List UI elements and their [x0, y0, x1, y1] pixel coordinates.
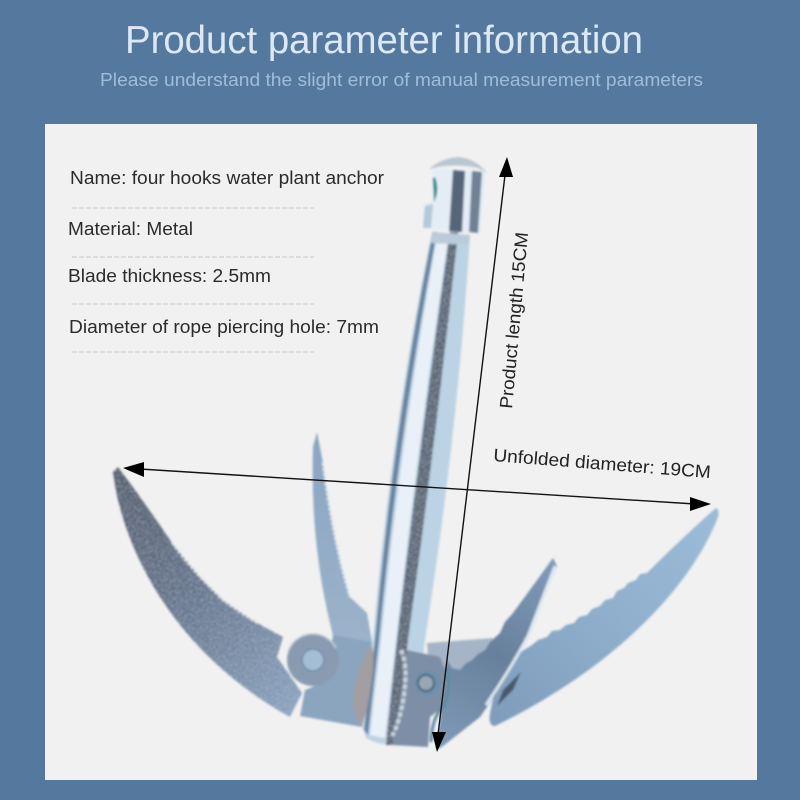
anchor illustration [113, 157, 719, 750]
left bracket [300, 635, 372, 727]
label: product length: Product length 15CM [496, 231, 532, 409]
arrow: product length [432, 157, 513, 752]
back blade [313, 432, 372, 642]
title: Product parameter information [125, 19, 643, 62]
shaft collar [431, 232, 470, 245]
left weld [353, 645, 374, 726]
head [423, 157, 487, 233]
parameter: material: Material: Metal [68, 219, 193, 239]
shaft [362, 232, 470, 745]
parameter list [68, 168, 384, 337]
label: unfolded diameter: Unfolded diameter: 19CM [493, 445, 712, 482]
shaft weld [392, 650, 405, 736]
shaft left edge band [364, 232, 437, 735]
shaft highlight band [370, 232, 449, 738]
shaft dark band [386, 232, 458, 745]
panel: product photo [45, 124, 757, 780]
right bracket [392, 650, 448, 747]
small right blade [436, 558, 557, 750]
right large blade [490, 508, 719, 726]
subtitle: Please understand the slight error of manual measurement parameters [100, 69, 703, 90]
left large blade [113, 467, 302, 717]
icon: rope hole [433, 177, 437, 202]
parameter: blade thickness: Blade thickness: 2.5mm [68, 266, 271, 286]
rear fold blade [427, 638, 493, 690]
parameter: rope hole diameter: Diameter of rope piercing hole: 7mm [69, 317, 379, 337]
arrow: unfolded diameter [123, 462, 711, 511]
parameter: name: Name: four hooks water plant anchor [70, 168, 384, 188]
hinge [287, 634, 339, 686]
